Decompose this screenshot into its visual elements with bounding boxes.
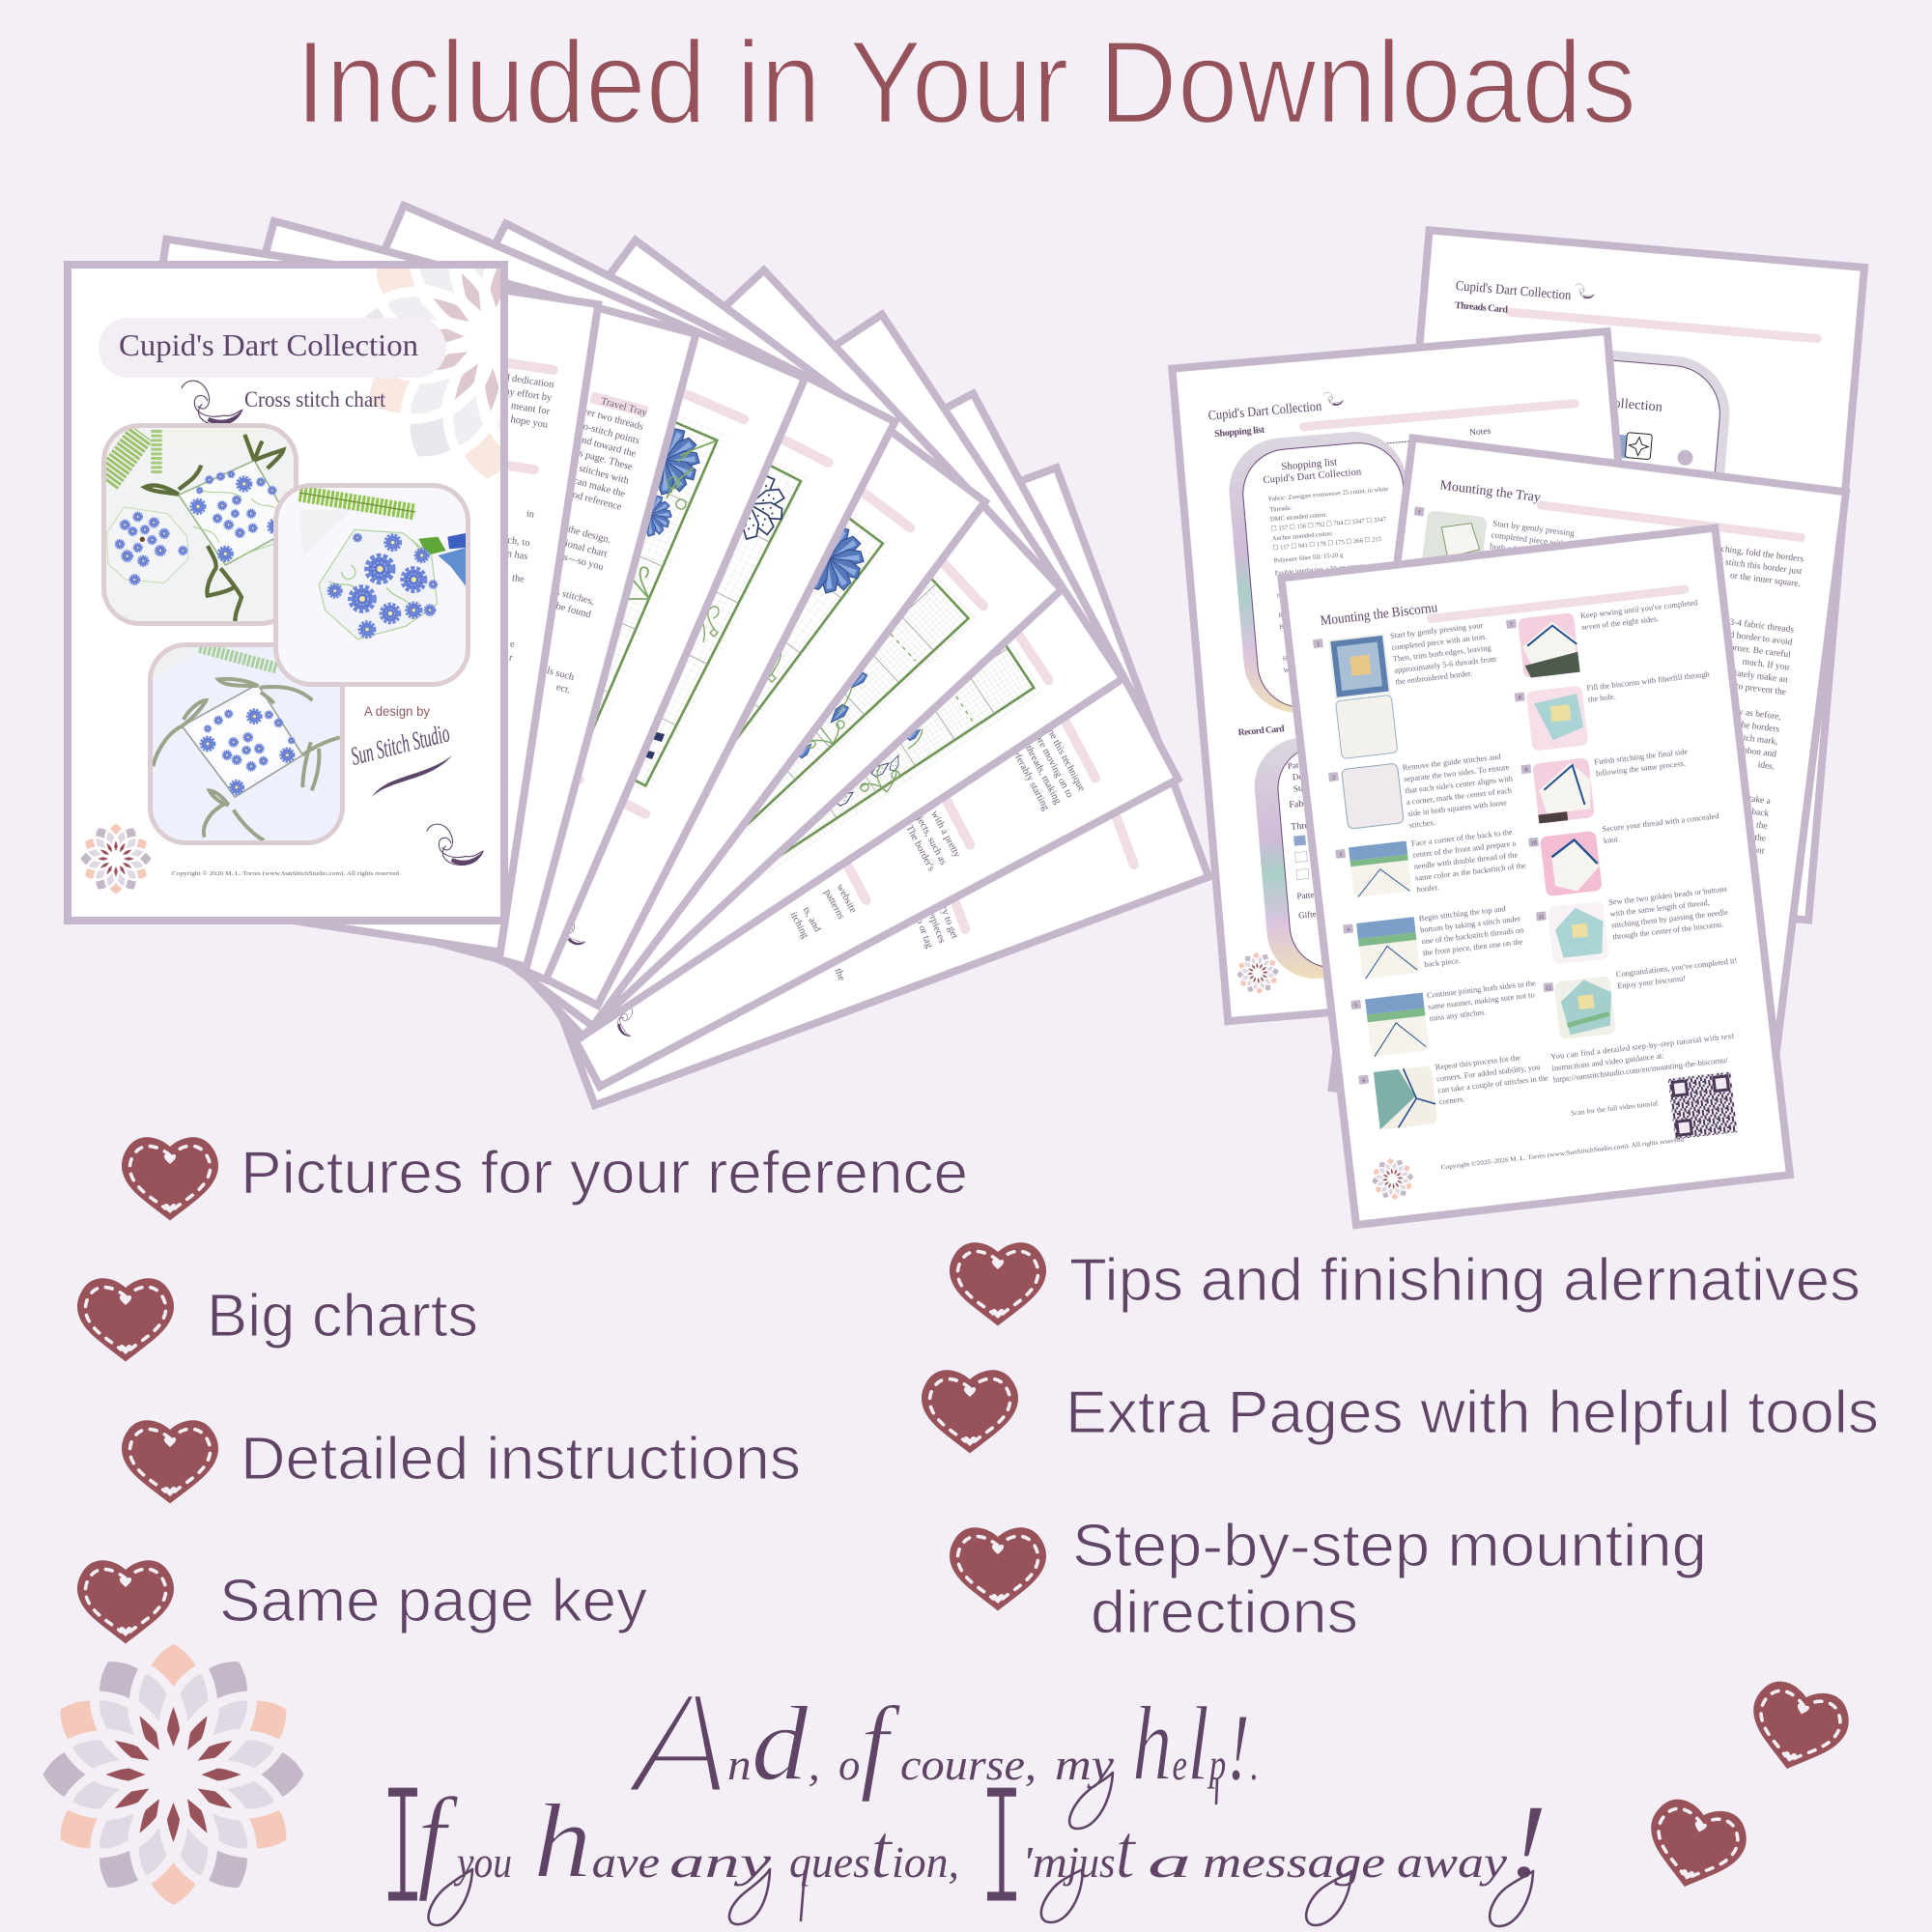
record card: Fabric (1289, 798, 1315, 810)
fan page 9 (442, 468, 1208, 1105)
step 5 (1350, 979, 1542, 1059)
step 1: approximately 5-6 threads from (1394, 654, 1497, 675)
fan page 2: travel tray text: ss stitches, (551, 586, 595, 608)
step 1: Start by gently pressing your (1390, 621, 1484, 640)
fan page 1: dedication text: is meant for (501, 399, 551, 417)
line 2: you (454, 1837, 512, 1887)
line 2: question, (789, 1809, 959, 1894)
step 6: corners. (1438, 1094, 1465, 1106)
fan page 1: dedication text (69, 240, 598, 952)
panel: shopping list page: Record Card (1237, 724, 1286, 738)
page copyright: Copyright ©2025–2026 M. L. Torres (www.SunStitchStudio.com). All rights reserved (1440, 1136, 1685, 1172)
shopping list card: Shopping list (1281, 456, 1338, 472)
fan page 8: jects, such as (914, 814, 949, 867)
line 1: of (838, 1685, 901, 1803)
fan page 8: referably starting (1009, 746, 1051, 813)
fan page 4 with chart (209, 223, 895, 1006)
cover title pill (99, 318, 446, 378)
bullet: detailed instructions (122, 1420, 801, 1503)
cover subtitle: Cross stitch chart (244, 387, 386, 412)
panel: mounting the tray page (1332, 438, 1846, 1142)
small mandala (1228, 943, 1288, 1004)
step 7: seven of the eight sides. (1581, 614, 1660, 632)
panel: shopping list page: Shopping list (1214, 425, 1265, 440)
cover mandala watermark (364, 269, 500, 479)
panel: mounting the tray page: much. If you (1742, 656, 1790, 672)
panel: mounting the tray page: ched border to avoid (1717, 629, 1793, 648)
step 12: Congratulations, you've completed it! (1615, 956, 1738, 979)
step 2: side in both squares with loose (1407, 798, 1508, 818)
fan page 2: travel tray text: f the design. (561, 523, 611, 546)
fan page 1: dedication text: in (526, 509, 535, 521)
step 7: 7 (1510, 622, 1513, 629)
tutorial link text (1550, 1032, 1738, 1085)
bullet: tips (950, 1242, 1861, 1325)
step 7: Keep sewing until you've completed (1579, 598, 1698, 620)
panel: threads card page: Threads Card (1455, 300, 1509, 316)
step 12: 12 (1546, 985, 1551, 992)
step 5: 5 (1354, 1003, 1358, 1009)
cover design-by label: A design by (364, 704, 430, 719)
step 3 (1335, 827, 1528, 903)
fan page 9: ry to get (938, 905, 960, 940)
line 2: a (1148, 1837, 1191, 1887)
tutorial link text: You can find a detailed step-by-step tutorial with text (1550, 1032, 1735, 1062)
panel: threads card page: Collection (1604, 396, 1662, 415)
shopping list card: Fabric: Zweigart evenweave 25 count, in white (1268, 486, 1389, 503)
step 7 (1506, 598, 1705, 680)
line 1: course, (900, 1740, 1037, 1789)
step 4: bottom by taking a stitch under (1420, 914, 1521, 934)
fan page 8: patterns (822, 888, 846, 922)
panel: mounting the tray page: of the borders (1728, 718, 1780, 735)
step 6 (1358, 1050, 1552, 1131)
bullet: extra pages (922, 1370, 1879, 1453)
line 2: f (417, 1774, 459, 1902)
panel: mounting the tray page: rea to prevent the (1722, 680, 1786, 697)
step 8: Fill the biscornu with fiberfill through (1586, 669, 1711, 693)
fan page 8: before moving on to (1027, 722, 1075, 800)
title: Included in Your Downloads (296, 16, 1636, 148)
step 3: 3 (1339, 852, 1343, 859)
step 9: Finish stitching the final side (1594, 747, 1689, 767)
mandala logo (1, 1600, 346, 1932)
fan page 2: travel tray text: ks—so you (557, 551, 606, 573)
line 2: just (1063, 1809, 1137, 1894)
step 11: with the same length of thread, (1609, 898, 1710, 919)
fan page 2: travel tray text: over two threads (577, 405, 644, 433)
line 1: my (1055, 1740, 1115, 1789)
step 1: the embroidered border. (1395, 668, 1473, 687)
fan page 3 with chart (145, 206, 805, 980)
page mandala (1362, 1148, 1423, 1209)
panel: mounting the tray page: the (1755, 821, 1768, 832)
step 6: corners. For added stability, you (1436, 1063, 1542, 1083)
chart 4 flower motifs (643, 469, 785, 759)
fan page 2: travel tray text: end toward the (576, 434, 638, 460)
step 8 (1515, 669, 1717, 753)
step 8: 8 (1519, 696, 1521, 701)
panel: mounting the tray page: take a (1748, 794, 1772, 807)
chart 3 flower motifs (628, 422, 717, 599)
step 5: same manner, making sure not to (1428, 990, 1535, 1011)
fan page 9: ts (725, 1012, 738, 1023)
record card: Gifted (1298, 909, 1321, 921)
record card: Pattern (1296, 889, 1322, 901)
shopping list card: Threads: (1269, 505, 1293, 514)
panel: mounting the tray page: ides. (1757, 760, 1776, 772)
step 11: Sew the two golden beads or buttons (1608, 885, 1727, 907)
panel: cover page (64, 261, 508, 924)
panel: shopping list page (1172, 331, 1663, 1021)
fan page 1: dedication text: y Dark (450, 876, 479, 891)
fan page 1: dedication text: in (468, 893, 477, 904)
bullet: step-by-step: Step-by-step mounting (1072, 1513, 1707, 1579)
closing script message (380, 1662, 1548, 1932)
fan page 2: travel tray text: ols such (541, 665, 576, 683)
QR code (1668, 1071, 1737, 1140)
panel: mounting the tray page: ont (1752, 845, 1765, 857)
step 2: a corner, mark the center of each (1406, 785, 1513, 807)
fan page 2: travel tray text: ood reference (566, 488, 623, 513)
step 6: Repeat this process for the (1435, 1053, 1521, 1072)
panel: mounting the tray page: 1 (1417, 510, 1421, 516)
icon: tilted heart lower (1637, 1794, 1752, 1899)
step 9: following the same process. (1595, 759, 1686, 778)
step 1 (1313, 619, 1506, 760)
fan page 2: travel tray text: ect. (555, 682, 572, 696)
step 1: 1 (1317, 641, 1320, 648)
cover small flourish (427, 824, 483, 866)
shopping list card (1225, 428, 1426, 717)
fan page 6 with chart (285, 270, 1062, 1037)
step 4: back piece. (1424, 956, 1461, 969)
line 2: message (1203, 1837, 1385, 1887)
step 11: 11 (1538, 915, 1545, 921)
panel: mounting the tray page: ne corner. Be careful (1715, 640, 1792, 661)
shopping list card: Polyester fiber fill: 15-20 g (1273, 552, 1344, 564)
bullet: pictures (122, 1137, 968, 1221)
panel: mounting the tray page: r back (1746, 807, 1770, 819)
step 6: 6 (1362, 1078, 1366, 1084)
bullet: extra pages: Extra Pages with helpful tools (1065, 1379, 1879, 1446)
bullet: tips: Tips and finishing alernatives (1069, 1247, 1861, 1314)
shopping list card: Sharp (1282, 655, 1298, 663)
step 9 (1520, 746, 1694, 825)
step 4: one of the backstitch threads on (1421, 925, 1525, 946)
tutorial link text: https://sunstitchstudio.com/en/mounting-the-biscornu/ (1553, 1056, 1729, 1085)
fan page 8: done this technique (1040, 719, 1087, 793)
panel: mounting the tray page: the (1754, 833, 1767, 844)
fan page 1: dedication text: the (511, 573, 526, 585)
shopping list card: Cupid's Dart Collection (1263, 467, 1362, 486)
step 5: Continue joining both sides in the (1427, 979, 1536, 1000)
panel: mounting the tray page: ribbon and (1737, 745, 1777, 759)
panel: mounting the tray page: or the inner square. (1729, 571, 1801, 589)
shopping list card: Anchor stranded cotton: (1271, 530, 1334, 542)
fan page 5 with chart (243, 241, 985, 1026)
panel: shopping list page: Notes (1469, 427, 1492, 439)
page heading: Mounting the Biscornu (1320, 600, 1438, 629)
step 10 (1528, 811, 1726, 898)
line 2: have (533, 1782, 660, 1900)
shopping list card: Needles (1277, 591, 1298, 600)
shopping list card: ☐ 117 ☐ 941 ☐ 178 ☐ 175 ☐ 266 ☐ 215 (1272, 535, 1382, 552)
panel: mounting the tray page: er stitching, fold the borders (1700, 541, 1804, 564)
photo: tray and biscornu (101, 423, 298, 626)
cover signature: Sun Stitch Studio (348, 719, 452, 771)
bullet: step-by-step: directions (1091, 1579, 1358, 1646)
record card: Thread (1291, 819, 1319, 833)
record card (1251, 726, 1458, 982)
shopping list card: Ribbons (1278, 611, 1300, 619)
panel: mounting the biscornu page (1281, 528, 1790, 1225)
record card: Start (1293, 782, 1311, 793)
step 2: Remove the guide stitches and (1402, 753, 1502, 772)
step 5: miss any stitches. (1429, 1008, 1487, 1023)
script descender flourishes (429, 1773, 1533, 1926)
panel: mounting the tray page: Start by gently pressing (1492, 518, 1576, 538)
cover signature (348, 719, 452, 797)
bullet: pictures: Pictures for your reference (241, 1140, 968, 1207)
step 12 (1543, 956, 1744, 1041)
panel: fan of chart pages (69, 206, 1208, 1105)
tutorial link text: instructions and video guidance at: (1551, 1051, 1664, 1073)
step 10: 10 (1530, 840, 1537, 847)
step 11: through the center of the biscornu. (1612, 920, 1724, 942)
step 11: stitching them by passing the needle (1611, 908, 1729, 930)
fan page 8 (395, 393, 1179, 1087)
step 4 (1343, 902, 1528, 980)
fan page 8: itching (787, 910, 810, 941)
line 2: any (669, 1837, 772, 1887)
step 12: Enjoy your biscornu! (1617, 974, 1687, 990)
chart 5 flower motifs (768, 521, 867, 682)
step 10: knot. (1603, 835, 1620, 845)
line 1: help!. (1132, 1685, 1259, 1803)
bullet: same page key (77, 1560, 647, 1644)
step 3: needle with double thread of the (1413, 850, 1519, 871)
panel: mounting the tray page: Mounting the Tray (1439, 478, 1542, 505)
fan page 2: travel tray text: can make the (572, 475, 627, 499)
step 3: same color as the backstitch of the (1415, 861, 1526, 883)
step 4: 4 (1347, 927, 1350, 933)
fan page 8: The border's (903, 823, 937, 873)
cover copyright: Copyright © 2026 M. L. Torres (www.SunStitchStudio.com). All rights reserved (172, 870, 400, 877)
panel: mounting the tray page: both edges (1490, 541, 1528, 555)
bullet: step-by-step (950, 1513, 1707, 1646)
fan page 1: dedication text: nd dedication (498, 372, 555, 390)
shopping list card: Fusible interfacing, a 50 cm square (1275, 562, 1365, 577)
chart 6 flower motifs (796, 670, 868, 760)
fan page 8: ts, and (801, 905, 823, 934)
step 1: completed piece with an iron. (1391, 633, 1488, 652)
fan page 8: e threads, making (1020, 738, 1064, 807)
cover flourish (182, 381, 242, 425)
step 2: separate the two sides. To ensure (1404, 763, 1510, 783)
step 2 (1328, 750, 1518, 838)
line 1: A (624, 1662, 732, 1824)
panel: mounting the tray page: completed piece with an (1491, 529, 1577, 550)
panel: threads card page (1374, 230, 1864, 920)
panel: threads card page: Cupid's Dart Collection (1455, 279, 1572, 303)
shopping list card: White (1283, 667, 1299, 674)
shopping list card: DMC stranded cotton: (1270, 511, 1327, 524)
cover small mandala (70, 811, 162, 906)
shopping list card: ☐ 157 ☐ 156 ☐ 792 ☐ 704 ☐ 3347 ☐ 3347 (1271, 515, 1387, 532)
chart 7 flower motifs (835, 726, 923, 808)
panel: mounting the tray page: ll stitch this border just (1718, 557, 1803, 577)
bullet: same page key: Same page key (219, 1568, 647, 1634)
fan page 7 with chart (335, 315, 1122, 1040)
fan page 2: travel tray text (104, 221, 696, 967)
panel: mounting the tray page: s 3-4 fabric threads (1723, 616, 1795, 636)
fan page 1: dedication text: my effort by (501, 385, 554, 404)
fan page 1: dedication text: n has (506, 549, 528, 562)
shopping list card: Beads (1279, 623, 1295, 631)
fan page 1: dedication text: ch, to (507, 535, 530, 549)
line 2: away! (1397, 1782, 1548, 1900)
fan page 2: travel tray text: be found (554, 601, 592, 621)
step 8: the hole. (1587, 693, 1616, 704)
fan page 2: travel tray text: ns page. These (573, 447, 634, 472)
fan page 2: travel tray text: ro-stitch points (579, 420, 640, 446)
step 10: Secure your thread with a concealed (1602, 811, 1720, 834)
line 1 (624, 1662, 1259, 1824)
fan page 9: erpieces (925, 910, 947, 945)
step 3: center of the front and prepare a (1412, 838, 1517, 860)
step 4: the front piece, then one on the (1423, 937, 1523, 957)
step 2: 2 (1332, 776, 1335, 781)
panel: mounting the tray page: way as before, (1727, 705, 1781, 723)
step 3: Face a corner of the back to the (1410, 828, 1513, 848)
step 1: Then, trim both edges, leaving (1392, 643, 1492, 664)
fan page 1: dedication text: r (508, 653, 514, 664)
step 3: border. (1416, 883, 1439, 895)
fan page 8: website (835, 883, 858, 915)
step 2: stitches. (1408, 818, 1435, 830)
record card: Pattern (1287, 759, 1313, 771)
icon: tilted heart upper (1740, 1676, 1855, 1781)
line 1: nd, (727, 1685, 820, 1803)
fan page 1: dedication text: ly hope you (499, 412, 550, 431)
fan page 2: travel tray text: tional chart (561, 538, 609, 560)
step 2: that each side's center aligns with (1405, 774, 1514, 795)
photo: biscornu close-up (273, 483, 470, 687)
line 2 (380, 1754, 1548, 1932)
bullet: detailed instructions: Detailed instructions (241, 1426, 801, 1492)
cover title pill: Cupid's Dart Collection (119, 327, 418, 362)
fan page 8: n with a pretty (925, 803, 962, 860)
record card: Design (1292, 770, 1318, 782)
photo: folded tray (148, 642, 345, 845)
panel: shopping list page: Cupid's Dart Collection (1208, 400, 1322, 424)
fan page 2: travel tray text: Travel Tray (600, 396, 649, 418)
QR caption: Scan for the full video tutorial (1571, 1098, 1659, 1118)
fan page 2: travel tray text: r stitches with (572, 462, 631, 487)
panel: mounting the tray page: stitch mark, (1734, 732, 1778, 748)
step 9: 9 (1524, 768, 1528, 774)
line 2: 'm (1022, 1837, 1067, 1887)
bullet: big charts: Big charts (207, 1283, 478, 1350)
step 4: Begin stitching the top and (1418, 904, 1507, 923)
step 6: can take a couple of stitches in the (1437, 1073, 1549, 1094)
fan page 1: dedication text: e (509, 639, 516, 650)
bullet: big charts (77, 1278, 478, 1362)
step 11 (1535, 885, 1733, 966)
panel: mounting the tray page: mediately make an (1719, 668, 1788, 685)
fan page 9: the (833, 967, 846, 982)
fan page 9: o or tag (914, 917, 935, 951)
